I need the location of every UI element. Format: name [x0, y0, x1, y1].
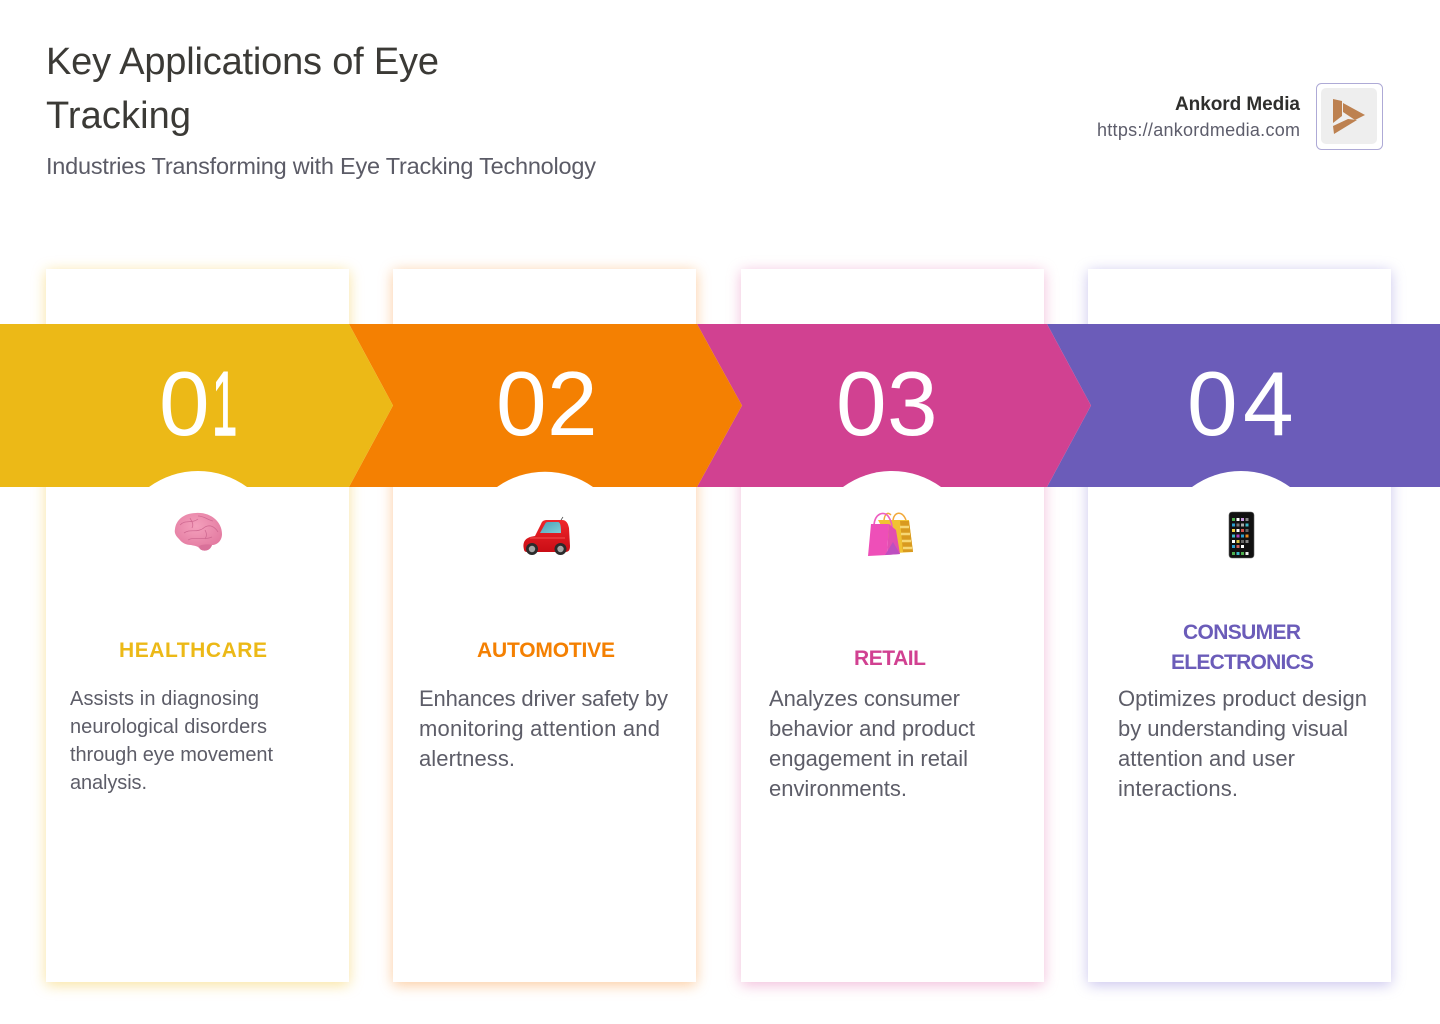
text: retail description: [769, 686, 975, 801]
text: consumer electronics description: [1118, 686, 1367, 801]
arrow: step 04: [1047, 324, 1440, 487]
panel: automotive card: [393, 269, 696, 985]
title: Tracking: [46, 95, 191, 137]
arrow: step 01: [0, 324, 393, 487]
heading: consumer electronics: ELECTRONICS: [1171, 651, 1314, 674]
arrow band: [0, 324, 1440, 487]
subtitle: Industries Transforming with Eye Tracking Technology: [46, 153, 596, 179]
number 03: 3: [887, 354, 938, 455]
text: automotive description: [419, 686, 668, 771]
text: healthcare description: neurological disorders: [70, 716, 267, 738]
text: healthcare description: analysis.: [70, 772, 147, 794]
brand name: Ankord Media: [1175, 94, 1300, 115]
icon: smartphone: [1229, 512, 1254, 558]
text: healthcare description: [70, 688, 273, 794]
heading: automotive: AUTOMOTIVE: [477, 639, 615, 662]
icon backdrop: white arcs: [149, 471, 1290, 487]
text: consumer electronics description: by understanding visual: [1118, 716, 1348, 741]
text: retail description: behavior and product: [769, 716, 975, 741]
number 02: 2: [547, 354, 598, 455]
panel: retail card: [741, 269, 1044, 985]
heading: consumer electronics: CONSUMER: [1183, 621, 1301, 644]
number 03: 0: [836, 354, 887, 455]
number 01: 1: [212, 354, 237, 455]
icon: shopping bags: [868, 513, 913, 556]
text: retail description: Analyzes consumer: [769, 686, 960, 711]
brand url: https://ankordmedia.com: [1097, 120, 1300, 140]
text: automotive description: monitoring attention and: [419, 716, 660, 741]
icon: brain: [175, 513, 222, 551]
text: healthcare description: through eye movement: [70, 744, 273, 766]
text: consumer electronics description: interactions.: [1118, 776, 1238, 801]
text: retail description: environments.: [769, 776, 907, 801]
text: retail description: engagement in retail: [769, 746, 968, 771]
heading: retail: RETAIL: [854, 647, 926, 670]
brand block: [1097, 84, 1382, 150]
arrow: step 03: [697, 324, 1091, 487]
panel: healthcare card: [46, 269, 349, 985]
number 04: 0: [1187, 354, 1238, 455]
title: Key Applications of Eye: [46, 41, 439, 83]
title: [46, 41, 439, 137]
text: healthcare description: Assists in diagnosing: [70, 688, 259, 710]
heading: consumer electronics: [1171, 621, 1314, 674]
text: consumer electronics description: Optimizes product design: [1118, 686, 1367, 711]
number 04: 4: [1243, 354, 1294, 455]
text: automotive description: alertness.: [419, 746, 515, 771]
panel: consumer electronics card: [1088, 269, 1391, 985]
number 02: 0: [496, 354, 547, 455]
number 01: 0: [159, 354, 210, 455]
heading: healthcare: HEALTHCARE: [119, 639, 267, 662]
number 01: [159, 354, 237, 455]
text: consumer electronics description: attention and user: [1118, 746, 1295, 771]
icon: car: [523, 517, 570, 555]
text: automotive description: Enhances driver safety by: [419, 686, 668, 711]
header: title block: [46, 41, 596, 179]
arrow: step 02: [349, 324, 742, 487]
icon: brand logo: [1316, 84, 1382, 150]
